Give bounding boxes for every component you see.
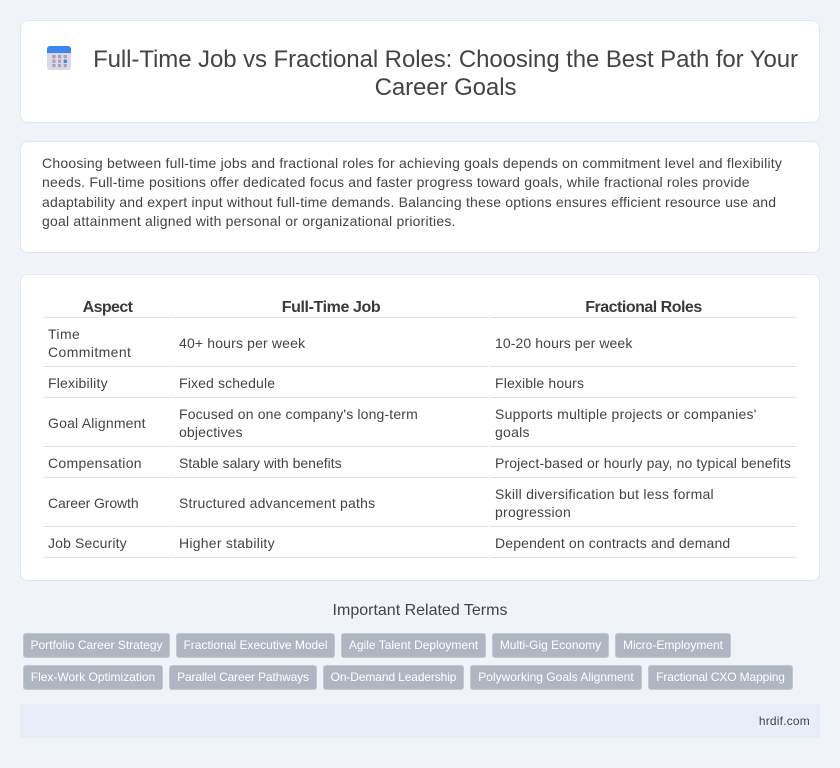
text block: introduction: goal attainment aligned with personal or organizational priorities. xyxy=(42,213,456,229)
text block: introduction: needs. Full-time positions offer dedicated focus and faster progress toward goals, while fractional roles provide xyxy=(42,174,750,190)
cell: Job Security fractional: Dependent on contracts and demand xyxy=(495,535,730,551)
cell: Career Growth fractional: Skill diversification but less formal xyxy=(495,486,714,502)
cell: Flexibility full-time: Fixed schedule xyxy=(179,375,275,391)
cell: Compensation full-time: Stable salary with benefits xyxy=(179,455,342,471)
cell: Career Growth full-time: Structured advancement paths xyxy=(179,495,375,511)
cell: Flexibility fractional: Flexible hours xyxy=(495,375,584,391)
table header: Aspect: Aspect xyxy=(83,299,132,316)
title: Full-Time Job vs Fractional Roles: Choosing the Best Path for Your xyxy=(93,46,798,73)
tag xyxy=(23,633,170,658)
icon: calendar xyxy=(47,46,71,70)
row: Goal Alignment: Goal Alignment xyxy=(48,415,146,431)
row: Time Commitment: Time xyxy=(48,326,80,342)
cell: Compensation fractional: Project-based or hourly pay, no typical benefits xyxy=(495,455,791,471)
row: Time Commitment xyxy=(48,326,131,360)
table header: Fractional Roles: Fractional Roles xyxy=(585,299,702,316)
row: Compensation: Compensation xyxy=(48,455,142,471)
text block: introduction: adaptability and expert input without full-time demands. Balancing these options ensures efficient resource use and xyxy=(42,194,776,210)
tag xyxy=(341,633,486,658)
tag xyxy=(470,665,642,690)
text block: introduction xyxy=(42,155,782,229)
tag: Parallel Career Pathways xyxy=(177,670,309,684)
tag: Fractional Executive Model xyxy=(183,638,328,652)
tag xyxy=(176,633,335,658)
panel: footer xyxy=(20,704,820,738)
text block: introduction: Choosing between full-time jobs and fractional roles for achieving goals depends on commitment level and flexibility xyxy=(42,155,782,171)
tag xyxy=(169,665,317,690)
cell: Time Commitment full-time: 40+ hours per week xyxy=(179,335,305,351)
panel: header xyxy=(20,20,820,123)
cell: Goal Alignment fractional xyxy=(495,406,757,440)
tag xyxy=(615,633,731,658)
row: Flexibility: Flexibility xyxy=(48,375,108,391)
cell: Time Commitment fractional: 10-20 hours per week xyxy=(495,335,632,351)
row: Time Commitment: Commitment xyxy=(48,344,131,360)
tag list xyxy=(23,633,793,690)
tag: Portfolio Career Strategy xyxy=(30,638,163,652)
heading: Important Related Terms: Important Related Terms xyxy=(333,602,507,619)
panel: comparison table xyxy=(20,274,820,581)
tag: Fractional CXO Mapping xyxy=(656,670,785,684)
tag: Multi-Gig Economy xyxy=(500,638,601,652)
tag: Micro-Employment xyxy=(623,638,723,652)
cell: Goal Alignment full-time xyxy=(179,406,418,440)
panel: introduction xyxy=(20,141,820,253)
footer: source: hrdif.com xyxy=(759,714,810,728)
title xyxy=(93,46,798,101)
cell: Goal Alignment fractional: goals xyxy=(495,424,530,440)
cell: Career Growth fractional xyxy=(495,486,714,520)
cell: Career Growth fractional: progression xyxy=(495,504,571,520)
tag xyxy=(492,633,609,658)
tag xyxy=(323,665,464,690)
tag: On-Demand Leadership xyxy=(331,670,456,684)
table header: Full-Time Job: Full-Time Job xyxy=(282,299,380,316)
row: Career Growth: Career Growth xyxy=(48,495,139,511)
cell: Goal Alignment full-time: objectives xyxy=(179,424,243,440)
tag xyxy=(23,665,163,690)
tag: Agile Talent Deployment xyxy=(349,638,478,652)
cell: Goal Alignment full-time: Focused on one company's long-term xyxy=(179,406,418,422)
tag: Polyworking Goals Alignment xyxy=(478,670,634,684)
tag xyxy=(648,665,793,690)
title: Career Goals xyxy=(375,74,516,101)
row: Job Security: Job Security xyxy=(48,535,127,551)
cell: Goal Alignment fractional: Supports multiple projects or companies' xyxy=(495,406,757,422)
cell: Job Security full-time: Higher stability xyxy=(179,535,275,551)
tag: Flex-Work Optimization xyxy=(31,670,155,684)
